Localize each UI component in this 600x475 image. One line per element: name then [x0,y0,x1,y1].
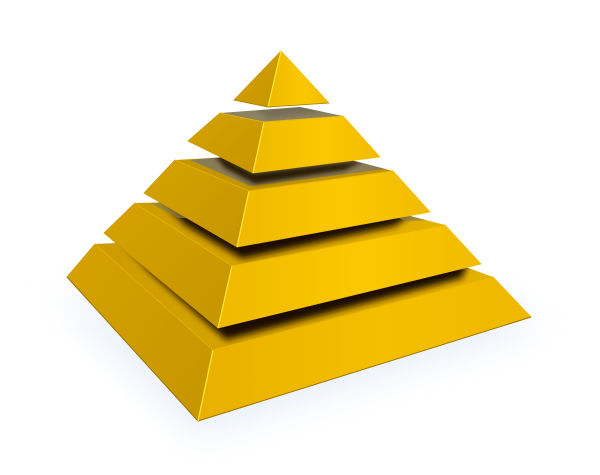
edges of tier 3 [237,191,249,247]
tier 3 [144,150,430,247]
edges of tier 2 [253,122,264,173]
left face of tier 3 [144,160,249,247]
top surface of tier 5 [95,232,493,350]
top surface of tier 4 [135,198,445,266]
right face of tier 4 [218,225,481,328]
ground shadow [55,290,540,435]
left face of capstone [234,51,281,107]
edges of tier 5 [67,277,531,421]
right face of capstone [268,51,329,107]
top surface of tier 3 [175,152,393,191]
tier 2 [188,103,380,173]
illustration: five-tier gold pyramid [66,50,532,434]
left face of tier 2 [188,113,264,173]
left face of tier 5 [67,244,213,421]
right face of tier 2 [253,116,380,173]
edges of tier 4 [218,266,232,328]
left face of tier 4 [104,203,232,328]
tier 4 [104,190,481,328]
top surface of tier 2 [220,107,343,122]
tier 5: base [67,232,531,421]
right face of tier 3 [237,171,430,247]
tier 1: capstone [234,51,329,107]
right face of tier 5 [198,277,531,421]
edges of capstone [268,51,281,107]
